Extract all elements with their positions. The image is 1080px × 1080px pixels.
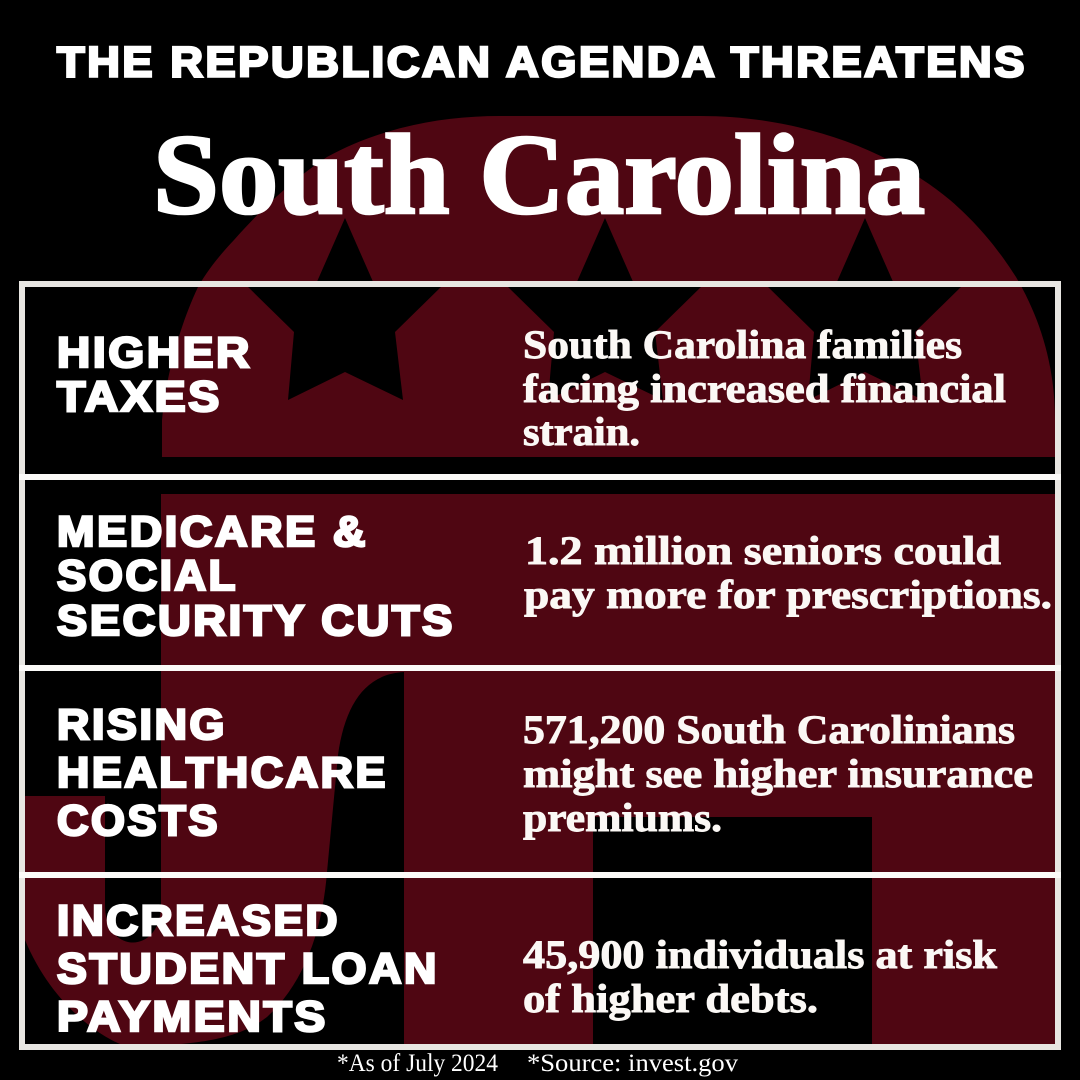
text: healthcare detail: 571,200 South Carolinians <box>523 707 1015 752</box>
label: medicare and social security cuts: MEDICARE & <box>57 508 368 556</box>
title: South Carolina <box>153 111 925 238</box>
text: higher taxes detail <box>523 322 1006 454</box>
elephant upper body with stars <box>162 116 1055 457</box>
heading: THE REPUBLICAN AGENDA THREATENS <box>57 38 1027 86</box>
text: healthcare detail: premiums. <box>523 795 722 840</box>
label: rising healthcare costs: COSTS <box>57 797 220 845</box>
text: student loan detail: 45,900 individuals at risk <box>523 932 998 977</box>
footnotes: *Source: invest.gov <box>527 1050 739 1077</box>
panel: higher taxes <box>57 322 1006 454</box>
label: increased student loan payments: PAYMENTS <box>57 993 328 1041</box>
text: medicare detail: pay more for prescriptions. <box>524 572 1052 617</box>
footnotes <box>337 1050 739 1077</box>
label: increased student loan payments: STUDENT LOAN <box>57 945 439 993</box>
label: higher taxes: TAXES <box>57 373 222 421</box>
label: rising healthcare costs: HEALTHCARE <box>57 749 388 797</box>
text: healthcare detail: might see higher insurance <box>523 751 1033 796</box>
frame: table outline <box>19 284 1061 1047</box>
label: higher taxes <box>57 329 252 421</box>
label: rising healthcare costs: RISING <box>57 701 227 749</box>
label: increased student loan payments <box>57 897 439 1041</box>
label: rising healthcare costs <box>57 701 388 845</box>
text: healthcare detail <box>523 707 1033 840</box>
label: higher taxes: HIGHER <box>57 329 252 377</box>
label: medicare and social security cuts: SOCIAL <box>57 552 238 600</box>
elephant lower body, legs and trunk <box>25 494 1055 1046</box>
text: higher taxes detail: strain. <box>523 409 640 454</box>
footnotes: *As of July 2024 <box>337 1050 498 1077</box>
label: medicare and social security cuts: SECURITY CUTS <box>57 597 455 645</box>
text: student loan detail <box>523 932 998 1021</box>
row dividers <box>19 474 1061 878</box>
panel: increased student loan payments <box>57 897 998 1041</box>
panel: medicare and social security cuts <box>57 508 1052 645</box>
label: increased student loan payments: INCREASED <box>57 897 340 945</box>
text: higher taxes detail: South Carolina families <box>523 322 962 367</box>
panel: rising healthcare costs <box>57 701 1033 845</box>
text: student loan detail: of higher debts. <box>523 976 818 1021</box>
label: medicare and social security cuts <box>57 508 455 645</box>
text: medicare detail: 1.2 million seniors could <box>525 528 1001 573</box>
text: medicare detail <box>524 528 1052 617</box>
text: higher taxes detail: facing increased financial <box>523 366 1006 411</box>
